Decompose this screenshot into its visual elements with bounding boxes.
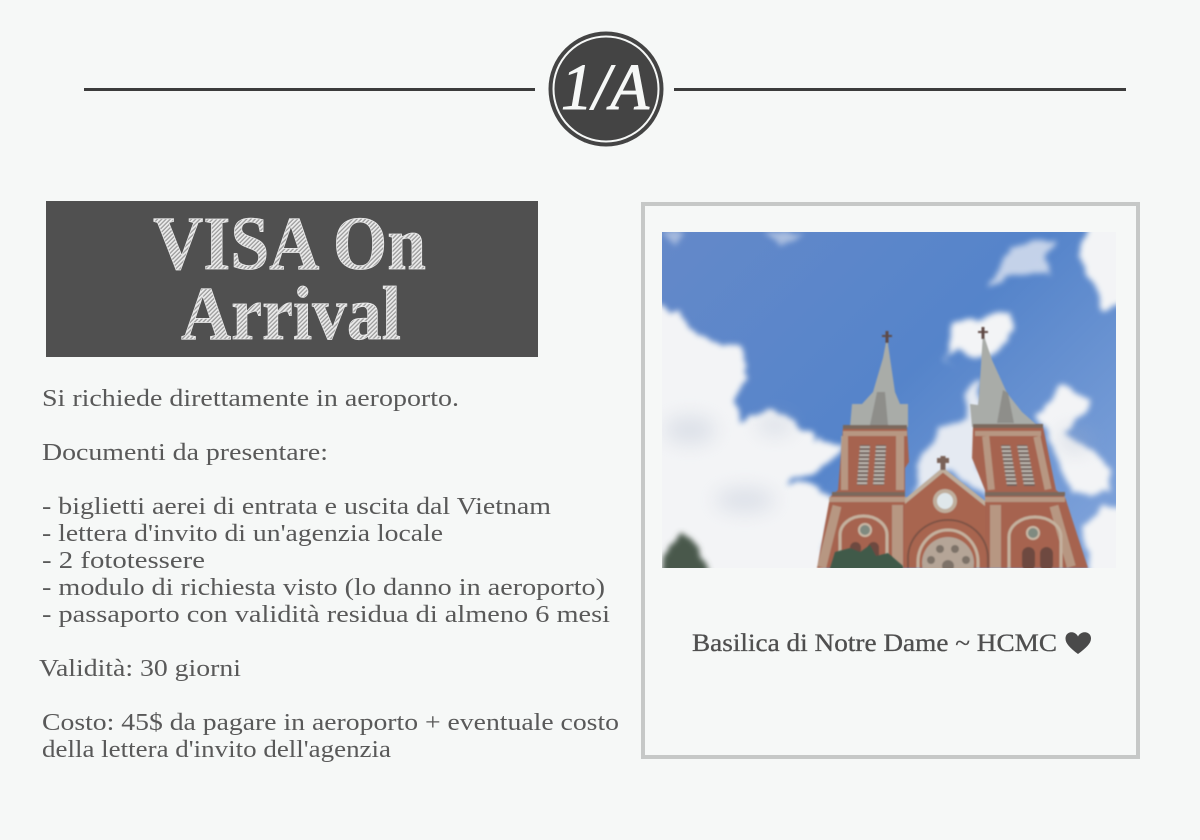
left tower — [817, 427, 909, 568]
body text: requirements: Validità: 30 giorni — [39, 656, 241, 682]
rose window — [921, 536, 975, 568]
header rule right — [674, 88, 1126, 91]
palm — [830, 545, 903, 570]
badge: 1/A — [548, 32, 664, 146]
title panel — [46, 201, 538, 357]
tree — [662, 530, 712, 568]
badge: 1/A: 1/A — [561, 51, 650, 124]
right spire — [970, 333, 1037, 427]
body text: requirements: Si richiede direttamente in aeroporto. — [42, 386, 459, 412]
lower windows — [1022, 547, 1035, 571]
body text: requirements: della lettera d'invito dell'agenzia — [42, 737, 391, 763]
right tower — [972, 427, 1088, 568]
body text: requirements: Documenti da presentare: — [42, 440, 328, 466]
body text: requirements: - 2 fototessere — [42, 548, 205, 574]
church — [817, 327, 1088, 589]
tower trim — [817, 431, 1076, 568]
photo caption: Basilica di Notre Dame ~ HCMC — [692, 630, 1057, 657]
polaroid frame — [643, 204, 1138, 757]
cloud shading — [664, 415, 1091, 512]
title text: VISA On — [153, 202, 426, 286]
header rule left — [84, 88, 535, 91]
body text: requirements: - lettera d'invito di un'agenzia locale — [42, 521, 443, 547]
photo: Notre Dame basilica — [662, 232, 1116, 568]
arches — [840, 516, 1061, 568]
body text: requirements — [39, 386, 619, 763]
body text: requirements: - passaporto con validità residua di almeno 6 mesi — [42, 602, 610, 628]
clock — [933, 489, 957, 513]
body text: requirements: - biglietti aerei di entrata e uscita dal Vietnam — [42, 494, 551, 520]
crosses — [886, 331, 888, 343]
icon: heart — [1066, 632, 1091, 654]
left spire — [850, 337, 908, 427]
body text: requirements: Costo: 45$ da pagare in aeroporto + eventuale costo — [42, 710, 619, 736]
title text: Arrival — [181, 272, 401, 356]
louvred windows — [857, 445, 1035, 486]
roundels — [859, 524, 871, 536]
central gable — [904, 472, 986, 568]
body text: requirements: - modulo di richiesta visto (lo danno in aeroporto) — [42, 575, 605, 601]
clouds — [662, 232, 1116, 568]
tower cornices — [832, 424, 1065, 496]
